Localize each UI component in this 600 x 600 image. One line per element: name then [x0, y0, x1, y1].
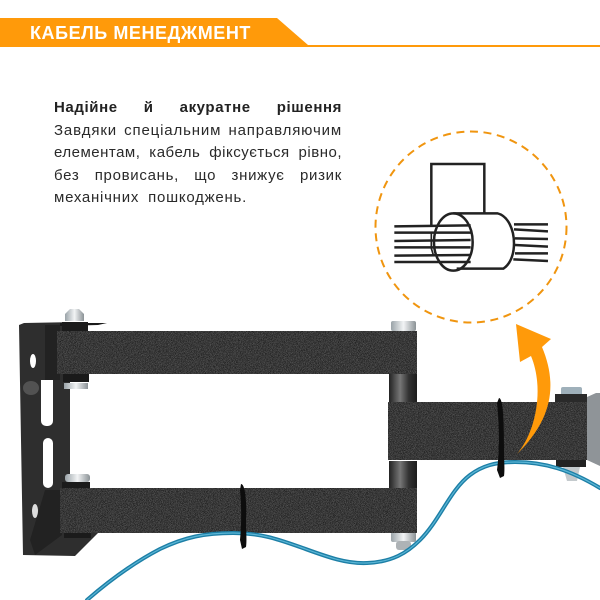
- arm: upper: [57, 331, 417, 374]
- bolts: [62, 309, 587, 550]
- circle callout: cable clamp detail: [376, 132, 566, 322]
- blue cable: [87, 462, 600, 600]
- text block: description: Завдяки спеціальним направляючим: [54, 122, 342, 139]
- cable tie: lower arm: [240, 484, 246, 549]
- banner: orange header ribbon: [0, 18, 600, 47]
- text block: description: Надійне й акуратне рішення: [54, 99, 342, 116]
- right end bracket: [587, 393, 600, 466]
- cable tie: middle arm: [497, 398, 504, 478]
- heading: КАБЕЛЬ МЕНЕДЖМЕНТ: [30, 23, 251, 43]
- arm: middle: [388, 402, 587, 460]
- icon: cable bundle in clamp: [394, 164, 548, 271]
- text block: description: механічних пошкоджень.: [54, 189, 247, 206]
- arrow: orange curved pointer: [516, 324, 551, 454]
- wall plate: [19, 322, 107, 556]
- pivot cylinders: [389, 374, 417, 488]
- text block: description: елементам, кабель фіксується рівно,: [54, 144, 342, 161]
- text block: description: без провисань, що знижує ризик: [54, 167, 342, 184]
- wall mount bracket photo: [19, 309, 600, 600]
- arm: lower: [60, 488, 417, 533]
- text block: description: [54, 99, 342, 206]
